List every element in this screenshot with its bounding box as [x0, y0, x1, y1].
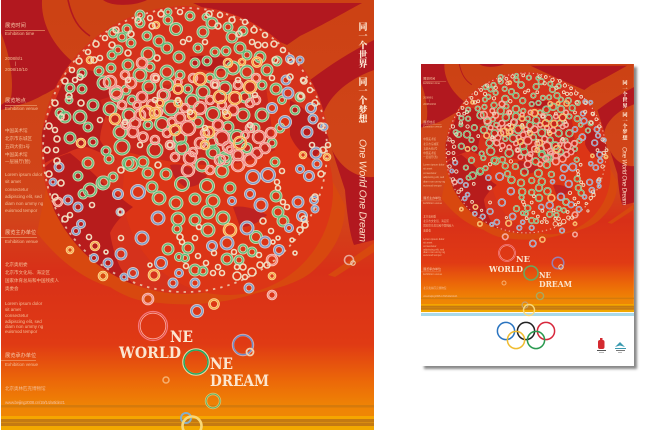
blue rings: [50, 56, 327, 316]
small slogan Chinese: [621, 79, 628, 141]
organiser: Exhibition venue: [5, 239, 39, 244]
small falling rings: [502, 281, 544, 316]
orange rings: [67, 22, 330, 308]
exhibition venue: sit amet: [5, 179, 22, 184]
exhibition venue: 展览地点: [5, 96, 26, 104]
contractor: 展览承办单位: [5, 351, 36, 359]
ring beside the slogan: [344, 256, 355, 265]
small pale rings: [44, 10, 330, 280]
exhibition venue: Exhibition venue: [5, 106, 39, 111]
exhibition venue: diam non ummy ng: [5, 201, 44, 206]
globe disc and continents: [41, 6, 333, 295]
small globe: [445, 72, 609, 247]
organiser: euismod tempor: [5, 329, 38, 334]
poster: large, red-orange background: [1, 0, 374, 430]
exhibition time: 2008/8/1: [5, 56, 23, 61]
contractor: Exhibition venue: [5, 362, 39, 367]
globe of rings: [41, 6, 333, 316]
organiser: Lorem ipsum dolor: [5, 301, 43, 306]
white sheet: [421, 64, 634, 366]
Beijing 2008 emblem: [597, 338, 606, 353]
organiser: 展览主办单位: [5, 228, 36, 236]
contractor: [1, 351, 65, 405]
small logo: NE: [539, 271, 551, 281]
falling rings, large: [163, 377, 220, 430]
exhibition venue: 五四大街1号: [5, 143, 31, 150]
exhibition time: [5, 21, 45, 72]
exhibition venue: 中国美术馆: [5, 151, 28, 158]
slogan: English rotated: One World One Dream: [356, 139, 368, 242]
small logo: NE: [516, 255, 531, 265]
small poster artwork: [421, 64, 634, 312]
organiser: diam non ummy ng: [5, 324, 44, 329]
contractor: www.beijing2008.cn/19/14/article21: [5, 400, 65, 405]
logo: One World One Dream, large: NE: [170, 327, 193, 346]
exhibition venue: [5, 96, 44, 213]
small logo: WORLD: [488, 265, 524, 275]
exhibition venue: consectetur: [5, 187, 29, 192]
logo: One World One Dream, large: WORLD: [118, 343, 181, 362]
exhibition venue: 一层展厅(暂): [5, 158, 31, 165]
organiser: [1, 228, 59, 334]
blue footer stripe: [421, 313, 634, 316]
logo: One World One Dream, large: NE: [210, 354, 233, 373]
exhibition time: 展览时间: [5, 21, 26, 29]
small logo: DREAM: [539, 280, 573, 290]
organiser: 国家体育总局和中国残疾人: [5, 277, 59, 284]
exhibition time: Exhibition time: [5, 31, 35, 36]
exhibition time: 2008/10/10: [5, 67, 28, 72]
small slogan Chinese: 同一个梦想: [621, 111, 628, 141]
logo: One World One Dream, large: [118, 312, 269, 390]
slogan: Chinese vertical: 同一个梦想: [356, 76, 370, 124]
organiser: sit amet: [5, 307, 22, 312]
green rings: [56, 9, 304, 275]
Paralympic emblem: [615, 342, 626, 353]
left column text: [1, 21, 65, 405]
logo: One World One Dream, large: DREAM: [210, 371, 269, 390]
Olympic rings: [497, 322, 555, 349]
exhibition venue: 中国美术馆: [5, 127, 28, 134]
organiser: 北京市文化局、海淀区: [5, 269, 50, 276]
organiser: consectetur: [5, 313, 29, 318]
organiser: 北京奥组委: [5, 261, 28, 268]
exhibition time: |: [15, 61, 16, 66]
exhibition venue: Lorem ipsum dolor: [5, 172, 43, 177]
small slogan English: One World One Dream: [620, 147, 628, 205]
slogan: Chinese vertical: 同一个世界: [356, 21, 370, 69]
rim of small rings: [43, 8, 327, 292]
organiser: adipiscing elit, sed: [5, 319, 42, 324]
small slogan Chinese: 同一个世界: [621, 79, 628, 109]
exhibition venue: 北京市东城区: [5, 135, 32, 142]
small logo: [488, 244, 573, 290]
contractor: 北京奥林匹克博物馆: [5, 385, 46, 392]
exhibition venue: euismod tempor: [5, 208, 38, 213]
shadow: [424, 67, 637, 369]
exhibition venue: adipiscing elit, sed: [5, 194, 42, 199]
slogan: Chinese vertical: [356, 21, 370, 124]
pink rings: [54, 58, 277, 304]
small column text: [421, 76, 458, 298]
organiser: 奥委会: [5, 285, 19, 292]
poster: small, with white footer: [421, 64, 637, 369]
